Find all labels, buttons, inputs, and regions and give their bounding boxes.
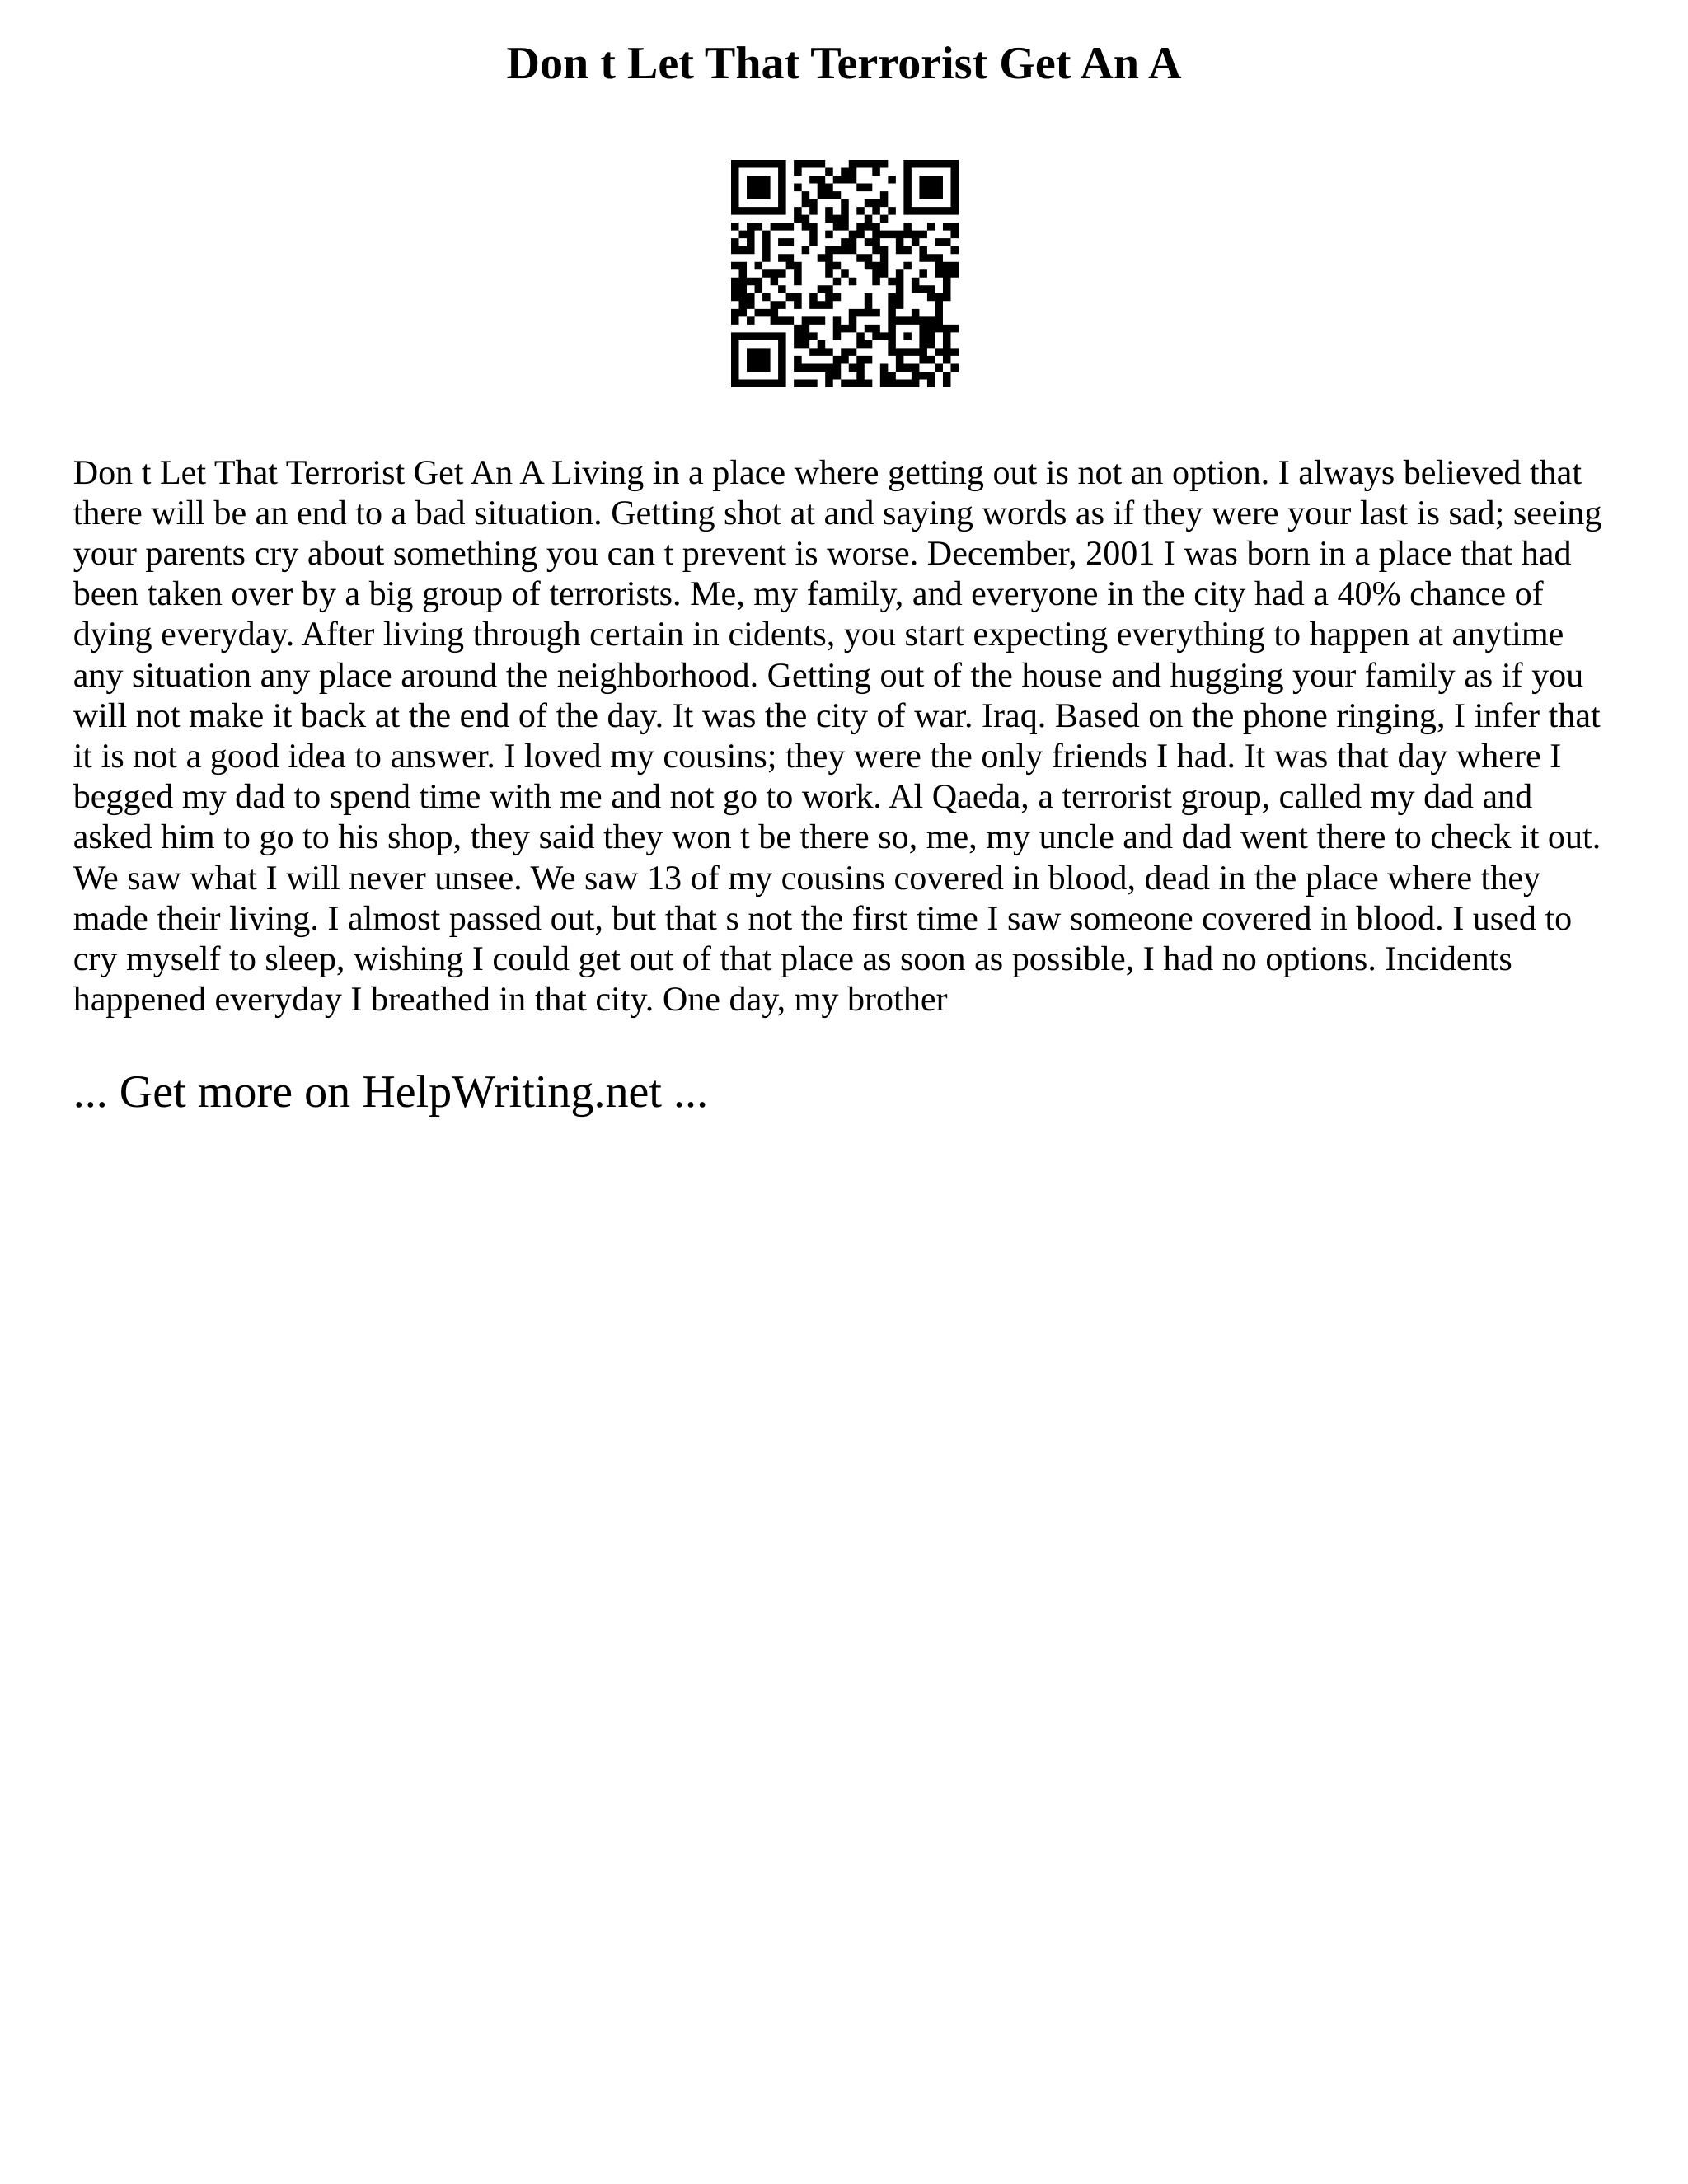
icon: QR code (731, 160, 959, 387)
body text: happened everyday I breathed in that city. One day, my brother (73, 980, 948, 1019)
body text: made their living. I almost passed out, but that s not the first time I saw someone covered in blood. I used to (73, 899, 1572, 938)
body text: it is not a good idea to answer. I loved my cousins; they were the only friends I had. It was that day where I (73, 737, 1561, 776)
body text: been taken over by a big group of terrorists. Me, my family, and everyone in the city had a 40% chance of (73, 574, 1544, 613)
body text: Don t Let That Terrorist Get An A Living in a place where getting out is not an option. I always believed that (73, 453, 1582, 492)
body text: asked him to go to his shop, they said they won t be there so, me, my uncle and dad went there to check it out. (73, 818, 1601, 856)
body text: dying everyday. After living through certain in cidents, you start expecting everything to happen at anytime (73, 615, 1564, 654)
body text: there will be an end to a bad situation. Getting shot at and saying words as if they were your last is sad; seeing (73, 494, 1601, 532)
body text: any situation any place around the neighborhood. Getting out of the house and hugging your family as if you (73, 656, 1583, 695)
body text (73, 453, 1601, 1019)
body text: begged my dad to spend time with me and not go to work. Al Qaeda, a terrorist group, called my dad and (73, 777, 1532, 816)
body text: your parents cry about something you can t prevent is worse. December, 2001 I was born in a place that had (73, 534, 1572, 573)
body text: cry myself to sleep, wishing I could get out of that place as soon as possible, I had no options. Incidents (73, 940, 1512, 978)
call to action link text: ... Get more on HelpWriting.net ... (73, 1066, 708, 1118)
body text: will not make it back at the end of the day. It was the city of war. Iraq. Based on the phone ringing, I infer that (73, 696, 1601, 735)
title: Don t Let That Terrorist Get An A (506, 38, 1182, 89)
body text: We saw what I will never unsee. We saw 13 of my cousins covered in blood, dead in the place where they (73, 859, 1540, 898)
